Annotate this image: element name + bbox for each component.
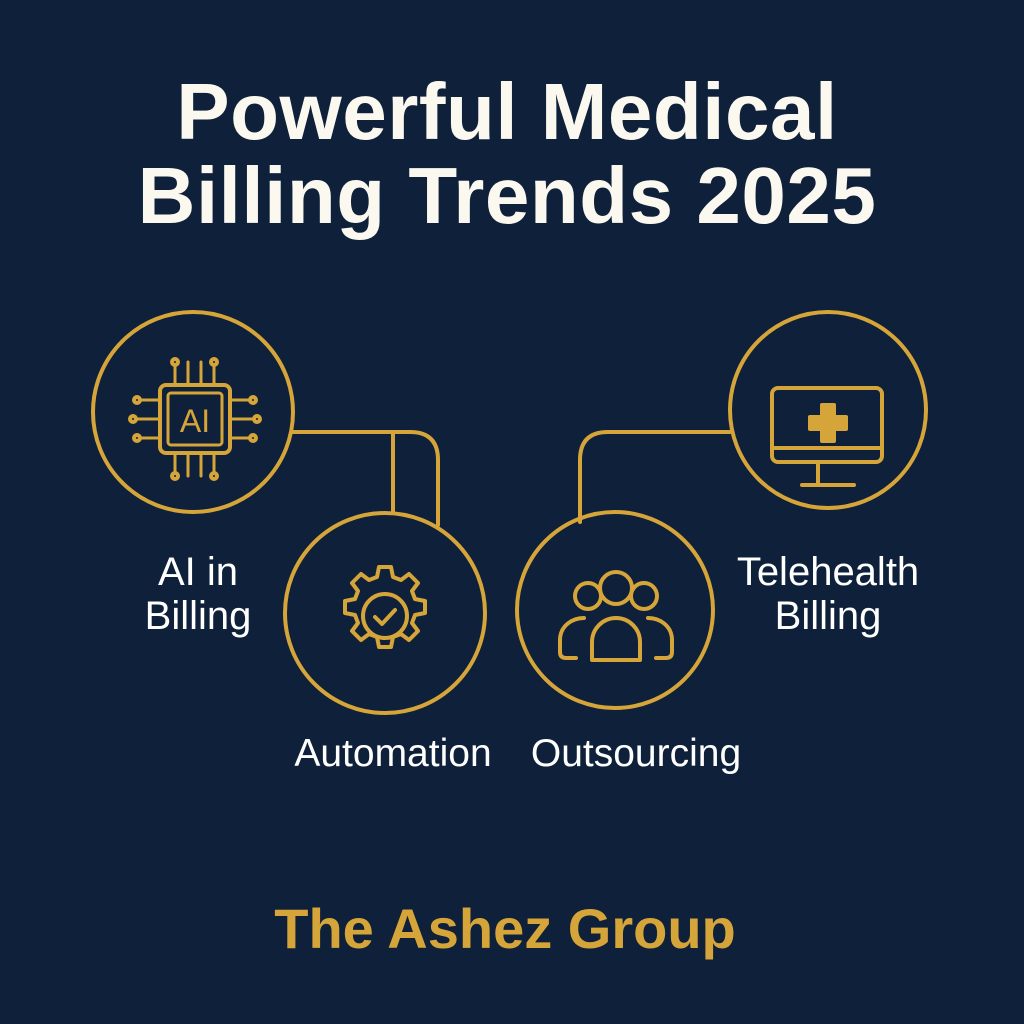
title: Powerful Medical — [176, 67, 838, 156]
title: Billing Trends 2025 — [138, 151, 876, 240]
icon: AI chip: AI — [180, 403, 210, 439]
connector: AI to Automation — [293, 432, 438, 525]
icon: gear — [285, 513, 485, 713]
title — [138, 67, 876, 240]
label: Automation: Automation — [294, 732, 492, 775]
label: Telehealth Billing — [737, 550, 919, 638]
label: Telehealth Billing: Telehealth — [737, 550, 919, 594]
label: AI in Billing: Billing — [145, 594, 251, 638]
footer brand: The Ashez Group — [274, 897, 736, 960]
label: Telehealth Billing: Billing — [775, 594, 881, 638]
icon: AI chip — [93, 312, 293, 512]
connector: Telehealth to Outsourcing — [580, 432, 730, 522]
icon: people — [517, 512, 713, 708]
label: AI in Billing — [145, 550, 251, 638]
label: AI in Billing: AI in — [158, 550, 238, 594]
icon: monitor — [730, 312, 926, 508]
label: Outsourcing: Outsourcing — [531, 732, 741, 775]
